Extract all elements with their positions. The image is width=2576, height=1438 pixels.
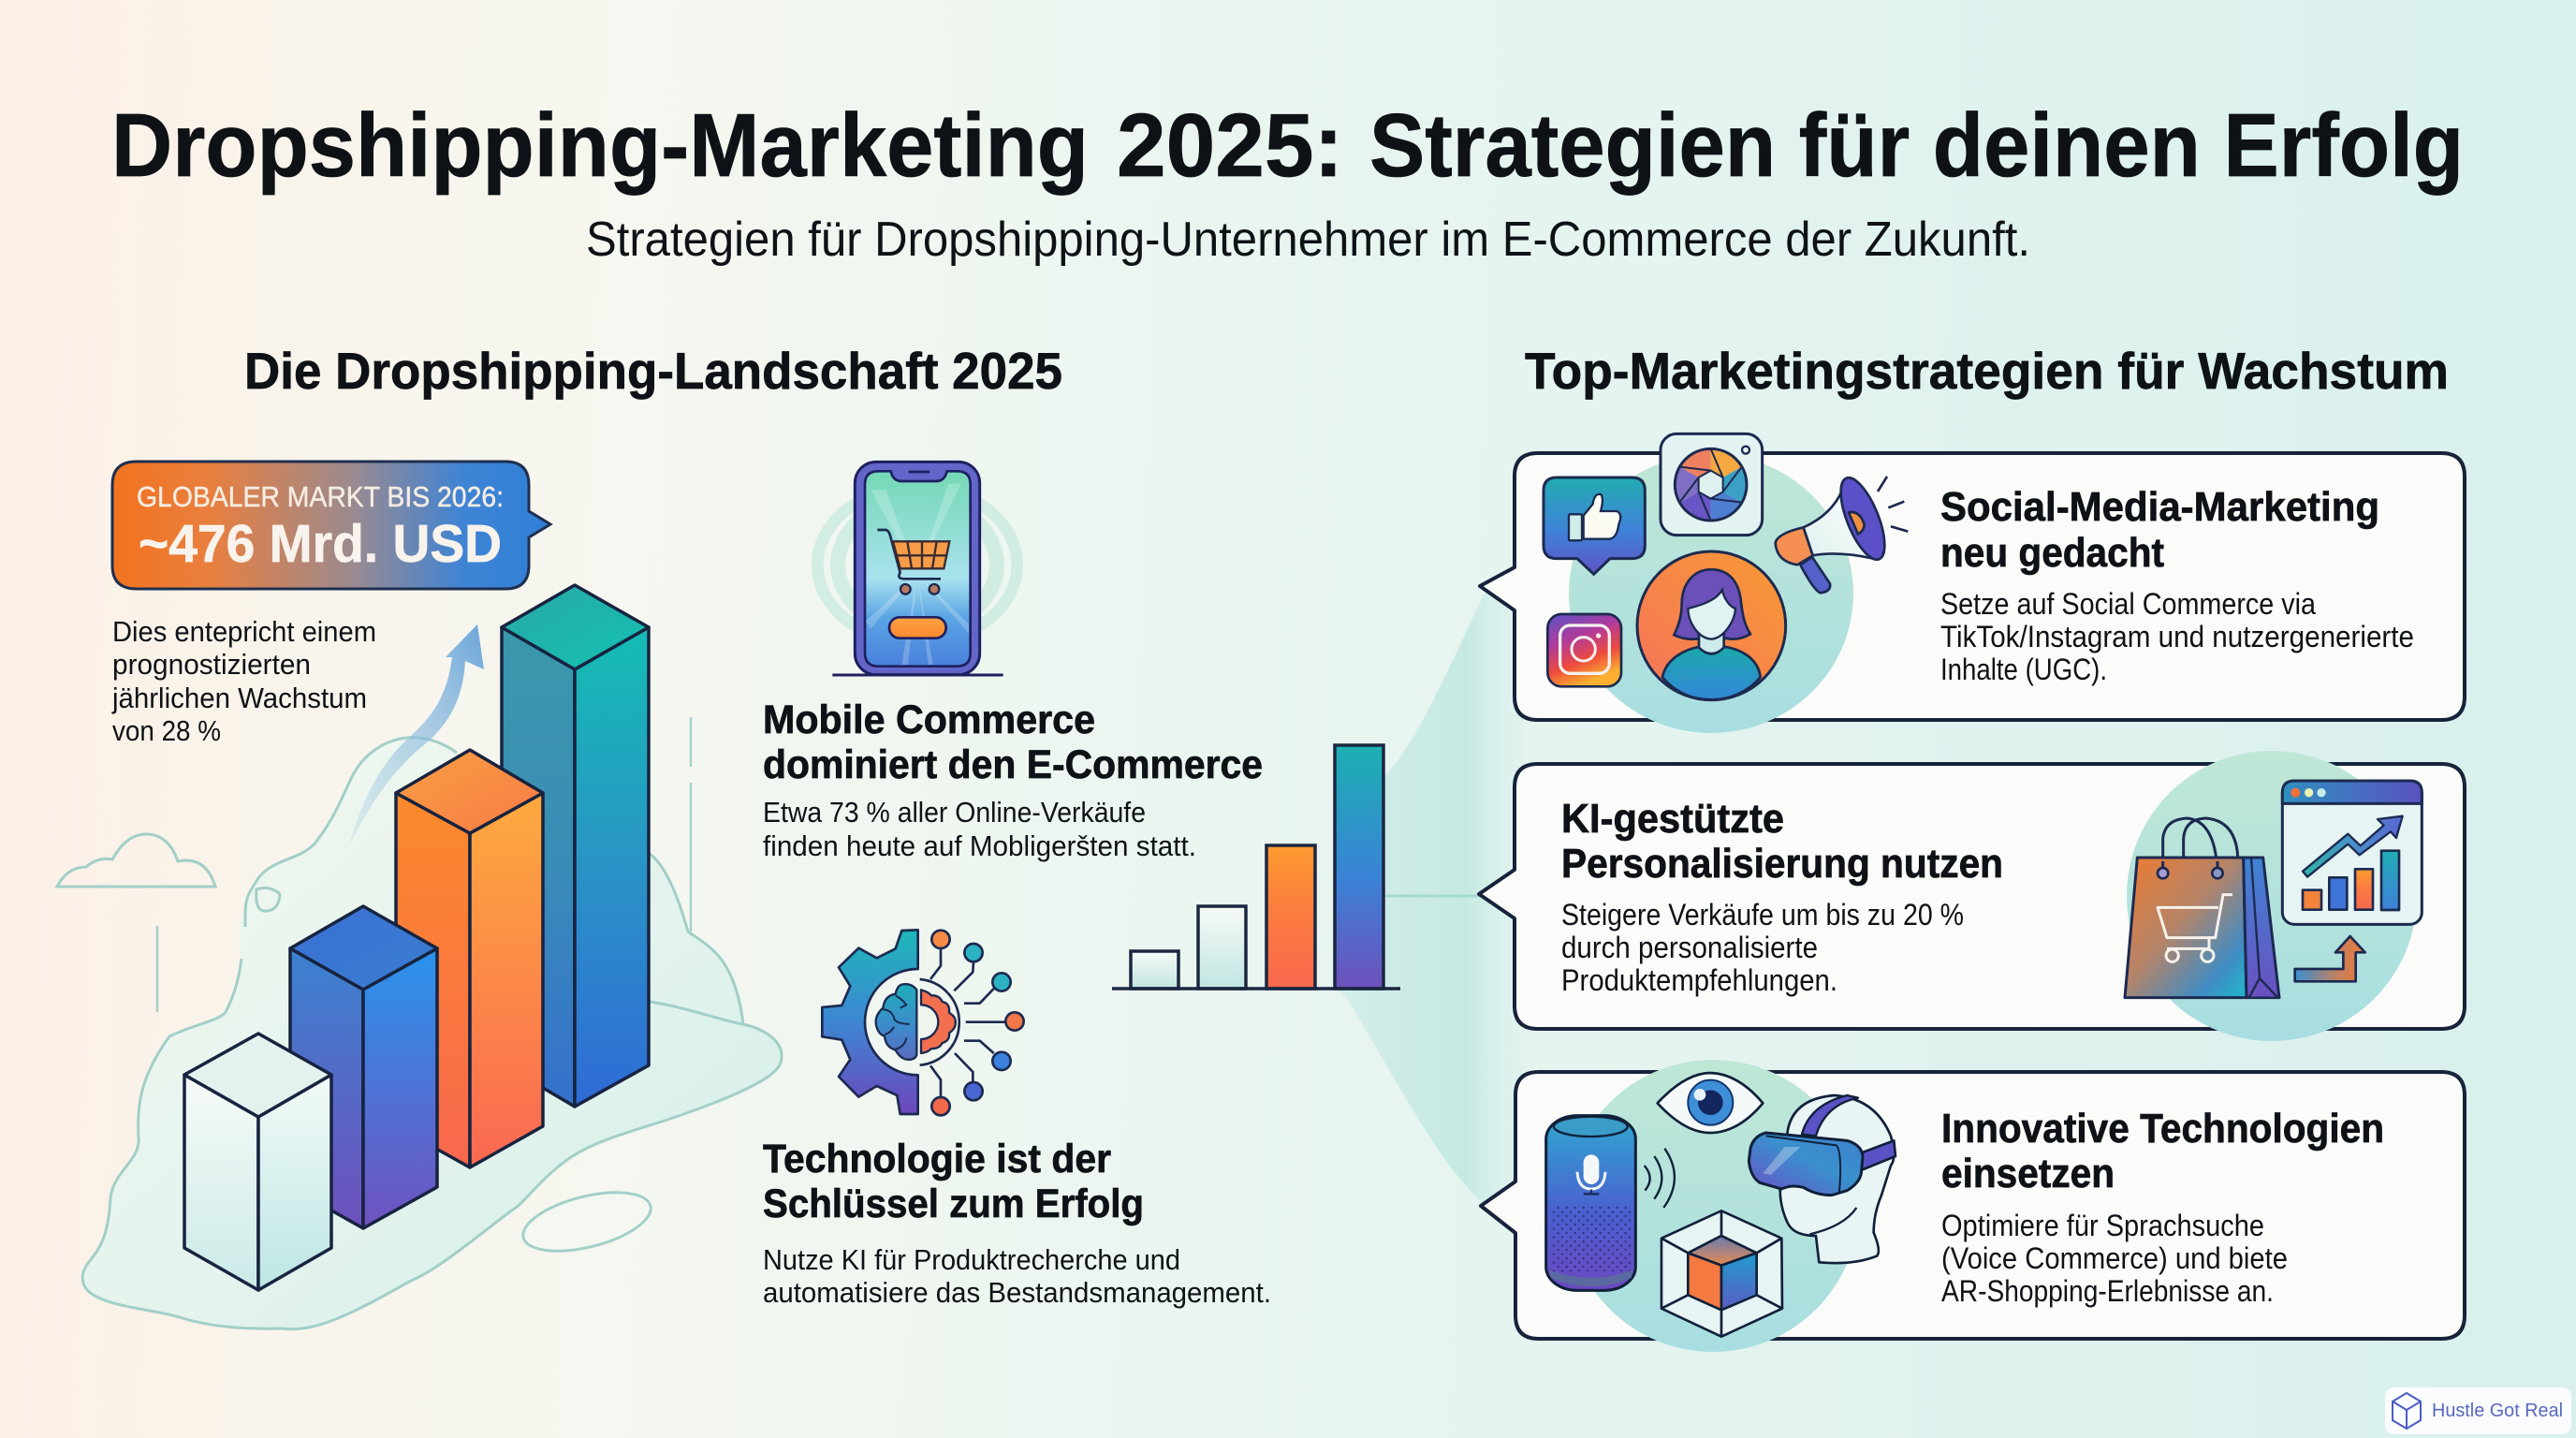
bar chart: small growth chart bbox=[1112, 745, 1400, 989]
text block: mobile commerce: Etwa 73 % aller Online-Verkäufe bbox=[763, 796, 1146, 829]
text block: mobile commerce: Mobile Commerce bbox=[763, 697, 1095, 742]
bar 4 teal bbox=[502, 585, 649, 1107]
icons: bag, browser and arrow bbox=[2125, 781, 2422, 998]
text block: growth description: von 28 % bbox=[112, 714, 221, 747]
card text: innovative tech: AR-Shopping-Erlebnisse an. bbox=[1941, 1274, 2274, 1308]
heading: right section: Top-Marketingstrategien für Wachstum bbox=[1525, 342, 2449, 400]
callout: global market: ~476 Mrd. USD bbox=[139, 514, 502, 574]
icon: like bubble bbox=[1544, 477, 1645, 574]
text block: technology: automatisiere das Bestandsmanagement. bbox=[763, 1276, 1271, 1309]
card text: innovative tech: Optimiere für Sprachsuche bbox=[1941, 1209, 2264, 1242]
icon: shopping bag bbox=[2125, 818, 2279, 998]
bar chart: isometric bars bbox=[184, 585, 649, 1290]
arrow: elbow up bbox=[2295, 936, 2365, 981]
text block: growth description: prognostizierten bbox=[112, 648, 311, 681]
card text: AI personalisation: KI-gestützte bbox=[1561, 796, 1784, 842]
text block: technology bbox=[763, 1137, 1271, 1309]
connector flow to strategies bbox=[1336, 585, 1535, 1208]
circuit nodes bbox=[930, 931, 1024, 1115]
card text: AI personalisation bbox=[1561, 796, 2003, 997]
text block: mobile commerce bbox=[763, 697, 1263, 862]
icon: camera aperture bbox=[1661, 433, 1763, 536]
card text: innovative tech bbox=[1941, 1106, 2384, 1308]
watermark badge: Hustle Got Real bbox=[2432, 1401, 2563, 1421]
card text: innovative tech: einsetzen bbox=[1941, 1151, 2115, 1196]
text block: growth description: Dies entepricht einem bbox=[112, 615, 376, 648]
panel: card AI personalisation bbox=[1479, 751, 2465, 1041]
card text: innovative tech: (Voice Commerce) und biete bbox=[1941, 1241, 2288, 1275]
icon: AR cube bbox=[1661, 1211, 1782, 1337]
text block: growth description: jährlichen Wachstum bbox=[111, 682, 367, 714]
icons: social media bbox=[1544, 433, 1908, 700]
icon: instagram bbox=[1547, 614, 1621, 686]
icon: person avatar bbox=[1637, 551, 1786, 700]
card text: AI personalisation: durch personalisierte bbox=[1561, 931, 1818, 964]
subtitle: Strategien für Dropshipping-Unternehmer im E-Commerce der Zukunft. bbox=[586, 213, 2030, 267]
text block: technology: Technologie ist der bbox=[763, 1137, 1111, 1181]
bar 2 blue bbox=[290, 906, 437, 1228]
watermark badge bbox=[2385, 1387, 2571, 1434]
card text: social media: TikTok/Instagram und nutzergenerierte bbox=[1940, 620, 2414, 653]
text block: technology: Nutze KI für Produktrecherche und bbox=[763, 1243, 1180, 1276]
icon: browser with chart bbox=[2282, 781, 2422, 924]
heading: left section: Die Dropshipping-Landschaft 2025 bbox=[244, 342, 1062, 400]
icon: VR head bbox=[1749, 1095, 1895, 1263]
icon: megaphone bbox=[1776, 472, 1908, 593]
title: Strategien für deinen Erfolg bbox=[1369, 95, 2464, 196]
card text: AI personalisation: Steigere Verkäufe um bis zu 20 % bbox=[1561, 898, 1964, 932]
arrow: growth bbox=[349, 624, 484, 845]
icons: tech bbox=[1546, 1073, 1895, 1337]
callout: global market: GLOBALER MARKT BIS 2026: bbox=[137, 480, 504, 513]
card text: social media: neu gedacht bbox=[1940, 530, 2164, 576]
card text: AI personalisation: Personalisierung nutzen bbox=[1561, 841, 2003, 887]
icon: cloud bbox=[57, 834, 215, 887]
text block: mobile commerce: dominiert den E-Commerce bbox=[763, 742, 1263, 787]
icon circle bbox=[1569, 454, 1853, 733]
card text: social media: Setze auf Social Commerce via bbox=[1940, 587, 2316, 621]
bar 3 orange bbox=[396, 750, 543, 1167]
icon: cart bbox=[877, 530, 949, 594]
icon circle bbox=[1567, 1060, 1859, 1352]
bar 1 white bbox=[184, 1034, 331, 1290]
card text: social media: Inhalte (UGC). bbox=[1940, 653, 2107, 686]
text block: mobile commerce: finden heute auf Mobligeršten statt. bbox=[763, 829, 1196, 862]
card text: social media bbox=[1940, 484, 2414, 686]
title: Dropshipping-Marketing bbox=[111, 95, 1089, 196]
icon: smartphone with cart bbox=[817, 462, 1017, 675]
panel: card innovative tech bbox=[1481, 1060, 2465, 1352]
callout: global market bbox=[112, 462, 550, 589]
background blob bbox=[82, 717, 782, 1329]
text block: growth description bbox=[111, 615, 376, 747]
icon: technology gear and brain bbox=[822, 930, 1024, 1115]
icon: eye bbox=[1658, 1073, 1763, 1133]
panel: card social media bbox=[1480, 433, 2465, 733]
card text: innovative tech: Innovative Technologien bbox=[1941, 1106, 2384, 1152]
title: 2025: bbox=[1117, 95, 1343, 196]
card text: AI personalisation: Produktempfehlungen. bbox=[1561, 963, 1837, 997]
text block: technology: Schlüssel zum Erfolg bbox=[763, 1181, 1144, 1226]
icon: smart speaker bbox=[1546, 1116, 1675, 1290]
panel: market landscape illustration bbox=[57, 585, 782, 1329]
icon circle bbox=[2127, 751, 2417, 1041]
card text: social media: Social-Media-Marketing bbox=[1940, 484, 2379, 530]
